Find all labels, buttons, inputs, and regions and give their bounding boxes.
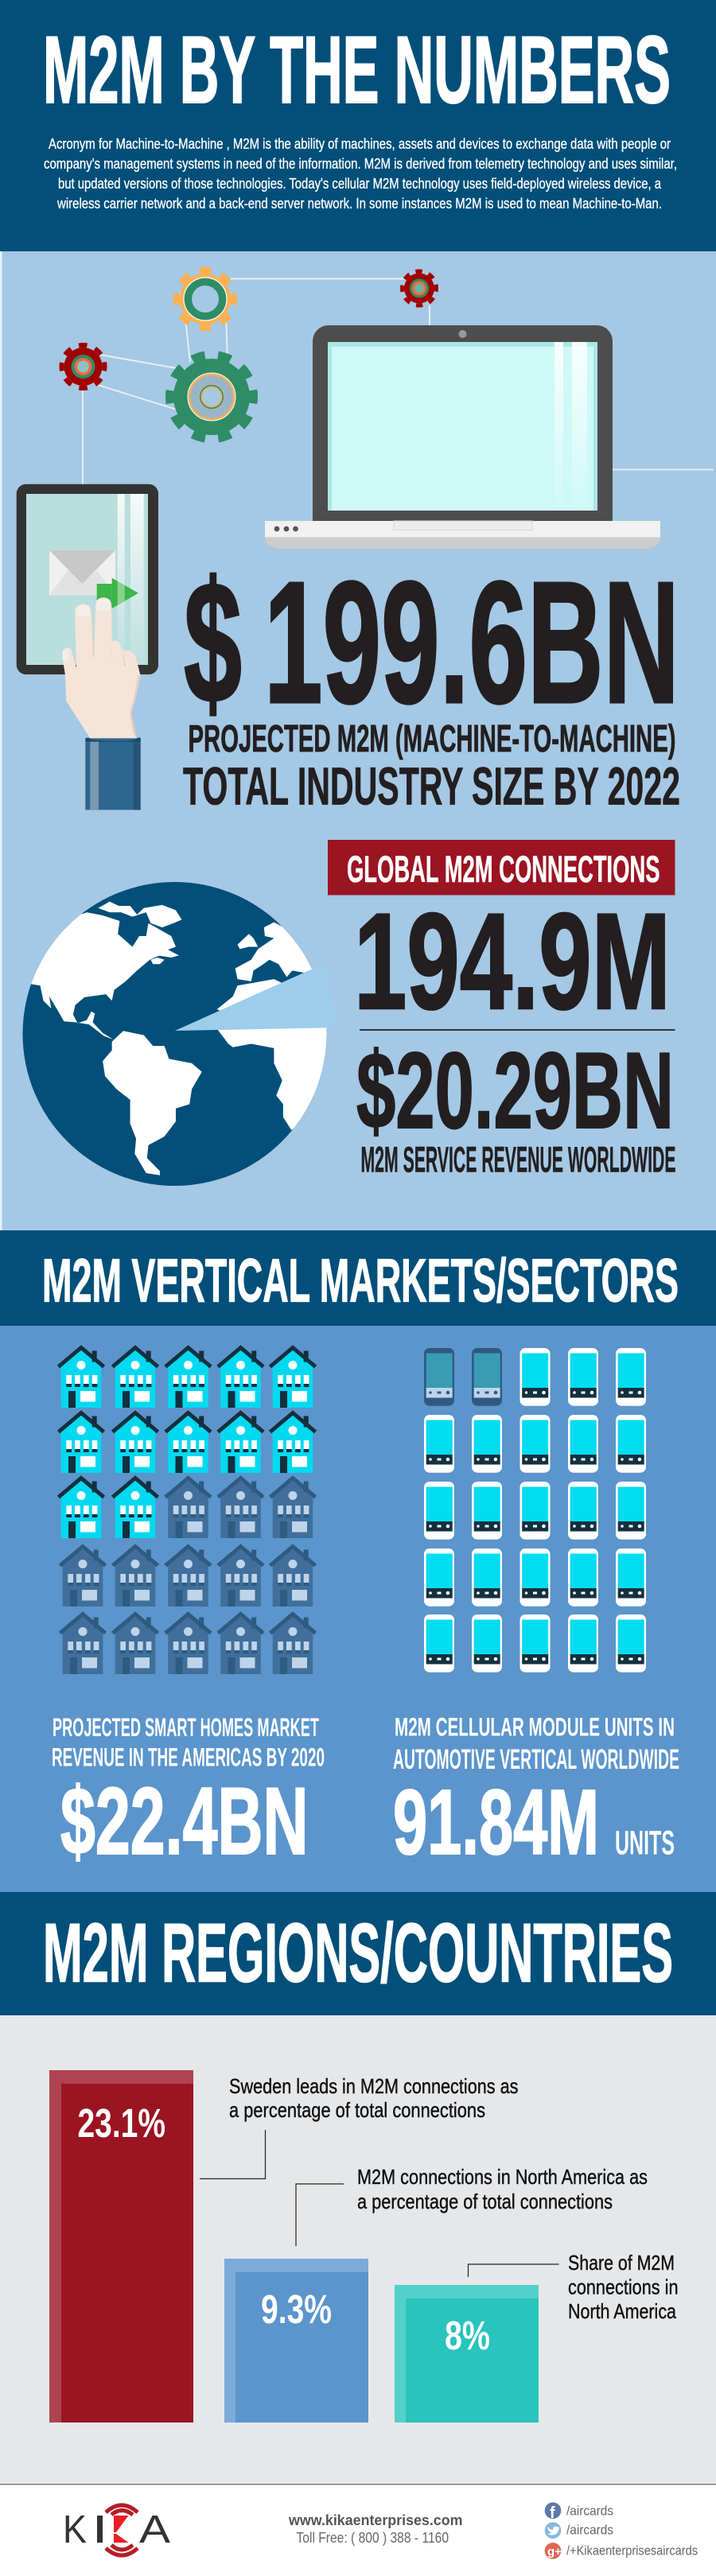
bar: North America share 8%: 8% bbox=[445, 2313, 490, 2358]
icon: globe bbox=[22, 882, 347, 1186]
callout: Sweden: a percentage of total connections bbox=[229, 2098, 485, 2122]
text: google plus handle: /+Kikaenterprisesaircards bbox=[566, 2543, 698, 2559]
text: website and phone bbox=[288, 2512, 463, 2546]
text: website and phone: www.kikaenterprises.com bbox=[288, 2512, 463, 2528]
intro paragraph bbox=[44, 136, 677, 212]
bar: North America 9.3%: 9.3% bbox=[261, 2287, 332, 2332]
icon array: phones bbox=[424, 1348, 646, 1673]
icon array: smart homes bbox=[59, 1347, 315, 1674]
panel: header band bbox=[0, 0, 716, 251]
callout: North America share bbox=[468, 2251, 678, 2323]
icon: facebook: f bbox=[550, 2504, 555, 2522]
text: smart homes caption bbox=[52, 1713, 325, 1772]
callout: Sweden bbox=[200, 2074, 519, 2179]
network connector lines bbox=[83, 278, 714, 484]
icon: google plus: g+ bbox=[547, 2545, 562, 2559]
logo: KIKA: K bbox=[63, 2508, 87, 2551]
icon: laptop bbox=[265, 325, 660, 549]
callout: North America share: North America bbox=[568, 2299, 676, 2323]
stat: 199.6BN: $ bbox=[184, 546, 242, 740]
text: smart homes caption: REVENUE IN THE AMERICAS BY 2020 bbox=[52, 1743, 325, 1772]
bar: North America 9.3% bbox=[224, 2259, 368, 2423]
icon: google plus bbox=[545, 2543, 562, 2559]
bar: Sweden 23.1%: 23.1% bbox=[78, 2100, 165, 2146]
icon: orange gear bbox=[177, 270, 234, 328]
text: cellular module caption bbox=[393, 1713, 679, 1775]
callout: North America share: Share of M2M bbox=[568, 2251, 675, 2275]
stat: 22.4BN: $22.4BN bbox=[60, 1768, 309, 1875]
panel: industry size and global connections bbox=[0, 251, 716, 1230]
callout: Sweden: Sweden leads in M2M connections as bbox=[229, 2074, 519, 2098]
panel: vertical markets bbox=[0, 1326, 716, 1892]
panel: vertical markets header bbox=[0, 1230, 716, 1326]
panel: regions chart bbox=[0, 2015, 716, 2485]
icon: green arrow bbox=[97, 578, 138, 608]
logo: KIKA bbox=[63, 2505, 170, 2555]
text: projected industry size bbox=[183, 717, 680, 816]
icon: tablet with envelope bbox=[17, 484, 158, 674]
callout: global connections label bbox=[328, 840, 675, 896]
bar: North America share 8% bbox=[395, 2285, 539, 2423]
stat: 91.84M units: UNITS bbox=[615, 1824, 675, 1863]
text: smart homes caption: PROJECTED SMART HOMES MARKET bbox=[53, 1713, 319, 1742]
callout: North America share: connections in bbox=[568, 2275, 678, 2299]
logo: KIKA: A bbox=[139, 2508, 170, 2551]
text: twitter handle: /aircards bbox=[566, 2523, 613, 2538]
panel: regions header bbox=[0, 1892, 716, 2015]
panel: footer bbox=[0, 2484, 716, 2559]
icon: red gear left bbox=[62, 345, 105, 388]
icon: facebook bbox=[545, 2502, 561, 2522]
callout: North America percentage bbox=[296, 2165, 648, 2246]
text: website and phone: Toll Free: ( 800 ) 388 - 1160 bbox=[296, 2530, 449, 2546]
icon: twitter bbox=[545, 2522, 561, 2539]
icon: hand and sleeve bbox=[62, 597, 141, 810]
text: facebook handle: /aircards bbox=[566, 2504, 613, 2519]
icon: large green gear bbox=[170, 355, 253, 439]
stat: 91.84M units: 91.84M bbox=[393, 1770, 599, 1874]
bar: Sweden 23.1% bbox=[49, 2070, 193, 2423]
icon: small red gear top bbox=[403, 271, 436, 305]
callout: North America percentage: a percentage of total connections bbox=[357, 2189, 613, 2213]
callout: North America percentage: M2M connections in North America as bbox=[357, 2165, 648, 2189]
